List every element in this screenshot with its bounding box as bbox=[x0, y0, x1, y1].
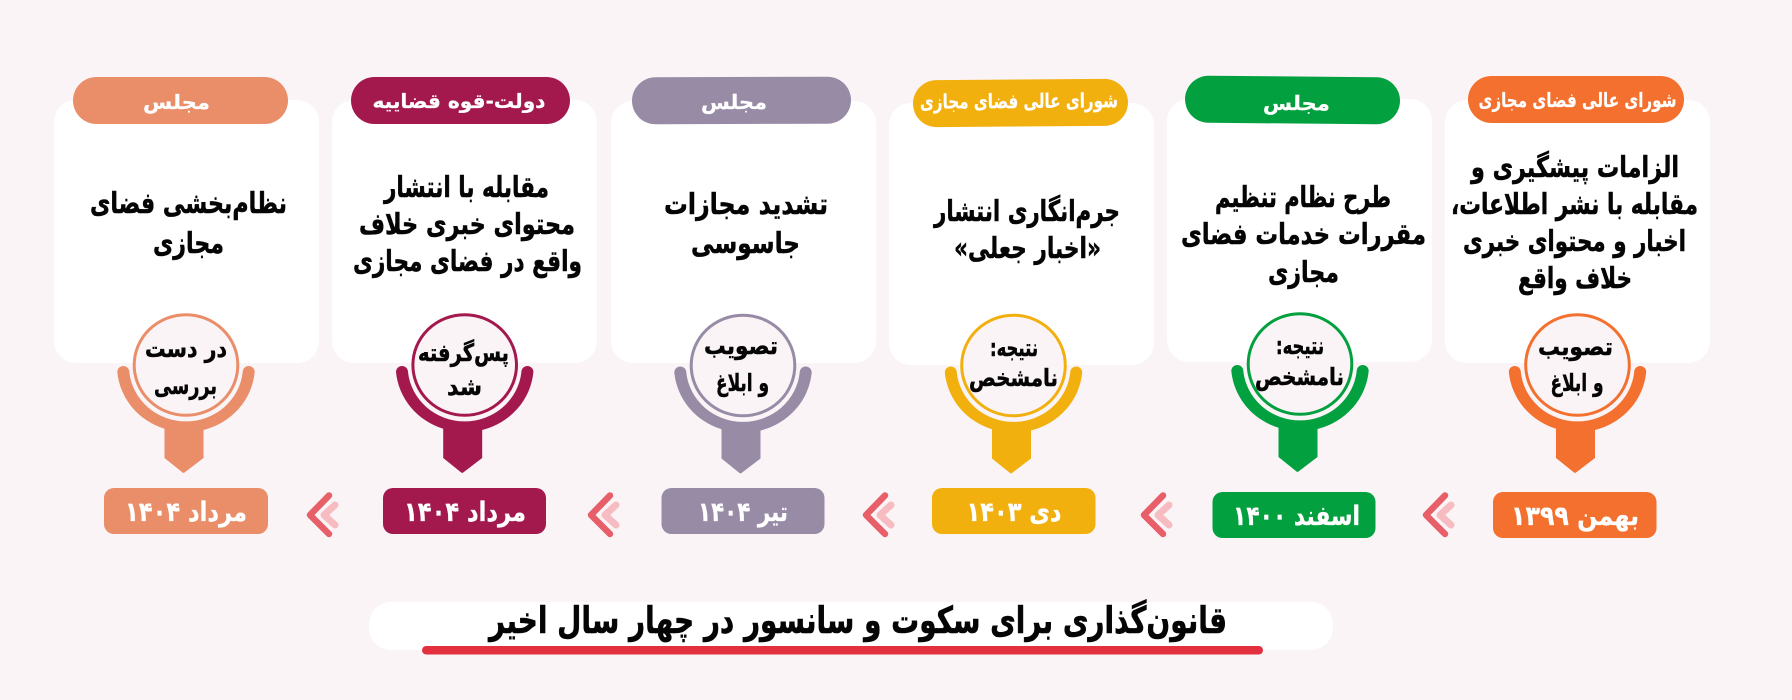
panel: step 1, Mordad 1404 bbox=[54, 77, 319, 534]
status circle bbox=[1526, 315, 1629, 415]
heading: bill title: مجازی bbox=[1268, 255, 1339, 289]
badge: Parliament bbox=[73, 77, 288, 124]
panel: step 4, Dey 1403 bbox=[889, 79, 1154, 534]
badge: Parliament bbox=[1185, 76, 1400, 124]
date label bbox=[383, 488, 546, 534]
icon: pin holder bbox=[1509, 366, 1646, 473]
date label bbox=[1493, 492, 1656, 538]
heading: bill title bbox=[664, 187, 828, 260]
heading: bill title bbox=[1451, 150, 1698, 295]
arrow: step 5 to step 4 bbox=[1144, 496, 1169, 534]
badge: Supreme Council of Cyberspace: شورای عالی فضای مجازی bbox=[920, 88, 1118, 114]
status circle: پس‌گرفته bbox=[418, 339, 509, 367]
status circle: شد bbox=[447, 373, 482, 401]
badge: Supreme Council of Cyberspace bbox=[913, 79, 1128, 127]
arrow: step 6 to step 5 bbox=[1426, 496, 1451, 534]
icon: pin holder bbox=[1231, 365, 1369, 472]
badge: Supreme Council of Cyberspace: شورای عالی فضای مجازی bbox=[1478, 88, 1676, 112]
heading: bill title bbox=[353, 170, 582, 278]
heading: bill title: نظام‌بخشی فضای bbox=[90, 186, 287, 220]
badge: Parliament bbox=[632, 77, 851, 124]
arrow: step 4 to step 3 bbox=[866, 496, 891, 534]
heading: bill title bbox=[90, 186, 287, 260]
card bbox=[1445, 100, 1710, 363]
heading: bill title: محتوای خبری خلاف bbox=[359, 207, 575, 241]
arrow: step 2 to step 1 bbox=[310, 496, 335, 534]
badge: Parliament: مجلس bbox=[701, 90, 767, 114]
panel: step 3, Tir 1404 bbox=[611, 77, 876, 534]
status circle: نامشخص bbox=[969, 364, 1058, 392]
badge: Government and Judiciary: دولت-قوه قضاییه bbox=[372, 89, 546, 113]
arrow: step 3 to step 2 bbox=[591, 496, 616, 534]
status circle: نامشخص bbox=[1255, 363, 1344, 391]
status circle: در دست bbox=[145, 335, 227, 363]
heading: bill title bbox=[933, 194, 1120, 265]
status circle: تصویب bbox=[1538, 333, 1613, 361]
title banner bbox=[369, 599, 1333, 654]
card bbox=[332, 100, 597, 363]
badge: Parliament: مجلس bbox=[1263, 91, 1330, 115]
card bbox=[889, 103, 1154, 365]
heading: bill title: تشدید مجازات bbox=[664, 187, 828, 221]
badge: Supreme Council of Cyberspace bbox=[1468, 76, 1684, 123]
status circle: و ابلاغ bbox=[1550, 369, 1604, 397]
date label: بهمن ۱۳۹۹ bbox=[1511, 501, 1639, 532]
heading: bill title: الزامات پیشگیری و bbox=[1469, 150, 1679, 185]
status circle: نتیجه: bbox=[990, 334, 1038, 362]
heading: bill title: مجازی bbox=[153, 226, 224, 260]
title: قانون‌گذاری برای سکوت و سانسور در چهار سال اخیر bbox=[487, 599, 1227, 642]
title underline bbox=[422, 646, 1263, 654]
icon: pin holder bbox=[396, 366, 533, 473]
badge: Government and Judiciary bbox=[351, 77, 570, 124]
status circle bbox=[413, 315, 516, 415]
card bbox=[54, 100, 319, 363]
heading: bill title: جاسوسی bbox=[691, 226, 800, 260]
date label bbox=[104, 488, 268, 534]
card bbox=[611, 101, 876, 363]
heading: bill title: اخبار و محتوای خبری bbox=[1463, 224, 1686, 258]
date label: تیر ۱۴۰۴ bbox=[698, 497, 788, 528]
heading: bill title: جرم‌انگاری انتشار bbox=[933, 194, 1120, 228]
status circle bbox=[134, 315, 238, 415]
panel: step 5, Esfand 1400 bbox=[1167, 76, 1432, 538]
heading: bill title: واقع در فضای مجازی bbox=[353, 244, 582, 278]
date label: مرداد ۱۴۰۴ bbox=[125, 497, 247, 528]
date label bbox=[1212, 492, 1376, 538]
badge: Parliament: مجلس bbox=[143, 90, 210, 114]
heading: bill title: خلاف واقع bbox=[1518, 261, 1632, 295]
status circle: و ابلاغ bbox=[716, 369, 769, 397]
heading: bill title bbox=[1181, 180, 1426, 289]
heading: bill title: طرح نظام تنظیم bbox=[1215, 180, 1391, 214]
status circle bbox=[691, 315, 795, 416]
heading: bill title: مقررات خدمات فضای bbox=[1181, 217, 1426, 251]
panel: step 6, Bahman 1399 bbox=[1445, 76, 1710, 538]
card bbox=[1167, 99, 1432, 362]
date label bbox=[932, 488, 1096, 534]
heading: bill title: مقابله با نشر اطلاعات، bbox=[1451, 187, 1698, 221]
heading: bill title: «اخبار جعلی» bbox=[954, 231, 1101, 265]
status circle bbox=[1248, 314, 1352, 414]
status circle: بررسی bbox=[154, 372, 217, 400]
status circle bbox=[962, 315, 1065, 416]
icon: pin holder bbox=[674, 367, 812, 473]
date label bbox=[662, 488, 824, 534]
status circle: تصویب bbox=[704, 332, 778, 360]
status circle: نتیجه: bbox=[1276, 332, 1324, 360]
date label: مرداد ۱۴۰۴ bbox=[404, 497, 526, 528]
icon: pin holder bbox=[117, 366, 255, 473]
date label: اسفند ۱۴۰۰ bbox=[1233, 501, 1360, 532]
date label: دی ۱۴۰۳ bbox=[967, 497, 1062, 528]
icon: pin holder bbox=[945, 367, 1082, 473]
heading: bill title: مقابله با انتشار bbox=[383, 170, 549, 204]
panel: step 2, Mordad 1404 bbox=[332, 77, 597, 534]
